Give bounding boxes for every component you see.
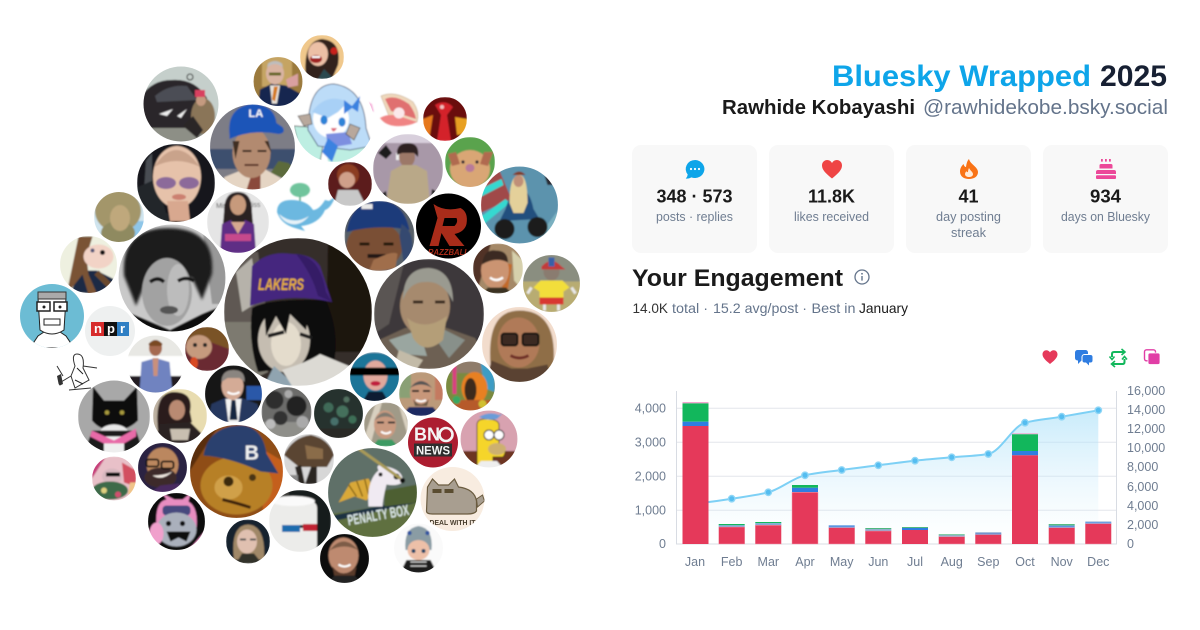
avatar: Homer with bird <box>460 410 518 468</box>
month labels: May <box>830 555 854 569</box>
engagement summary <box>632 300 908 316</box>
right axis labels: 2,000 <box>1127 518 1158 532</box>
engagement summary: 14.0K <box>632 300 669 316</box>
engagement summary: Best in <box>812 300 856 316</box>
month labels: Apr <box>795 555 815 569</box>
cumulative line <box>695 410 1098 504</box>
panel: days on Bluesky: 934 <box>1090 186 1122 206</box>
avatar: black and white portrait woman <box>118 224 226 332</box>
avatar: child on red couch <box>328 162 372 206</box>
avatar: game character in Lakers cap: LAKERS <box>258 275 304 294</box>
avatar: dark-haired woman <box>153 389 207 443</box>
month labels: Dec <box>1087 555 1109 569</box>
avatar: NPR logo: p <box>107 321 115 336</box>
right axis labels: 6,000 <box>1127 480 1158 494</box>
avatar: dog with sunglasses <box>92 456 136 500</box>
icon: pink shell <box>368 94 418 126</box>
avatar: blonde woman sitting outdoors <box>480 166 558 244</box>
avatar: pig-like animal on green <box>445 137 495 188</box>
panel: likes received <box>769 145 894 253</box>
icon: heart <box>822 160 842 178</box>
left axis labels: 3,000 <box>635 436 666 450</box>
cumulative area <box>695 410 1098 544</box>
avatar: woman with black glasses <box>482 306 558 382</box>
icon: chat bubble <box>686 160 704 179</box>
avatar: Penalty Box cartoon: PENALTY BOX <box>346 502 410 529</box>
avatar: creature in Dodgers cap <box>190 424 284 518</box>
heading: your engagement: Your Engagement <box>632 265 843 292</box>
avatar: black and white crowd <box>262 387 312 438</box>
month labels <box>685 555 1109 569</box>
avatar: man in navy suit and tie <box>204 365 262 423</box>
right axis labels: 12,000 <box>1127 422 1165 436</box>
avatar: white cylinder with 3D glasses <box>269 490 331 552</box>
month labels: Aug <box>941 555 963 569</box>
avatar: NPR logo: n <box>94 321 102 336</box>
month labels: Jul <box>907 555 923 569</box>
avatar: NPR logo <box>85 306 135 356</box>
right axis labels: 10,000 <box>1127 441 1165 455</box>
panel: posts and replies <box>632 145 757 253</box>
stacked bars <box>682 402 1111 544</box>
avatar: baseball player in blue helmet <box>344 201 414 271</box>
panel: posting streak: 41 <box>958 186 978 206</box>
avatar: cartoon man with glasses <box>20 284 84 348</box>
left axis labels: 0 <box>659 537 666 551</box>
avatar: BNO News logo: NEWS <box>416 446 450 458</box>
month labels: Jan <box>685 555 705 569</box>
panel: likes received: likes received <box>794 210 869 224</box>
chart: engagement by month <box>635 384 1165 569</box>
avatar: blue whale with tree <box>277 183 335 231</box>
avatar: man in Dodgers cap <box>210 104 296 190</box>
avatar: game character in Lakers cap <box>224 238 372 386</box>
right axis labels: 8,000 <box>1127 460 1158 474</box>
icon: replies legend <box>1075 350 1093 366</box>
user name and handle: @rawhidekobe.bsky.social <box>923 97 1168 119</box>
avatar: man in Dodgers cap: LA <box>248 108 263 120</box>
avatar: woman in purple dress <box>207 191 269 253</box>
avatar: pink-hat game mascot <box>148 492 206 550</box>
user name and handle <box>722 97 1168 119</box>
avatar cluster <box>20 35 580 584</box>
avatar: woman in purple dress: Miss <box>246 202 261 209</box>
avatar: red creature on fire <box>423 97 467 141</box>
avatar: kewpie doll <box>402 525 435 572</box>
avatar: ball pit with fire <box>446 361 496 411</box>
avatar: woman in purple dress: Miss <box>216 203 231 210</box>
icon: quotes legend <box>1144 350 1160 364</box>
left axis labels: 4,000 <box>635 402 666 416</box>
title: Bluesky Wrapped <box>832 60 1091 93</box>
engagement summary: total · <box>672 300 708 316</box>
left axis labels: 1,000 <box>635 504 666 518</box>
avatar: tuxedo cat with pink bow <box>78 380 150 454</box>
chart legend icons <box>1042 349 1160 367</box>
avatar: creature in Dodgers cap: B <box>244 442 259 464</box>
avatar: bull statue <box>284 434 334 484</box>
avatar: smiling man in car <box>473 244 523 294</box>
right axis labels: 4,000 <box>1127 499 1158 513</box>
avatar: sketch drawing <box>56 354 98 390</box>
avatar: laughing woman with red flower <box>300 35 344 79</box>
avatar: person with lollipop <box>185 327 229 371</box>
line markers <box>728 407 1102 502</box>
right axis labels: 0 <box>1127 537 1134 551</box>
avatar: Razzball logo <box>416 193 482 259</box>
avatar: blue-haired person with black bar <box>350 352 400 402</box>
panel: posts and replies: posts · replies <box>656 210 733 224</box>
panel: days on Bluesky <box>1043 145 1168 253</box>
avatar: Pusheen Deal With It <box>420 467 484 531</box>
panel: likes received: 11.8K <box>808 186 856 206</box>
month labels: Sep <box>977 555 999 569</box>
avatar: bald smiling man <box>320 534 370 584</box>
icon: flame <box>960 159 978 179</box>
panel: days on Bluesky: days on Bluesky <box>1061 210 1151 224</box>
engagement summary: 15.2 avg/post · <box>713 300 807 316</box>
avatar: smiling man in green shirt <box>364 402 408 446</box>
engagement summary: January <box>859 300 908 316</box>
avatar: Razzball logo: RAZZBALL <box>428 248 469 257</box>
month labels: Nov <box>1051 555 1074 569</box>
avatar: anime girl with blue hair <box>294 82 374 162</box>
panel: posting streak: day posting <box>936 210 1001 224</box>
avatar: smiling man in navy <box>399 372 443 416</box>
title: 2025 <box>1100 60 1167 93</box>
avatar: BNO News logo <box>408 418 458 468</box>
icon: reposts legend <box>1110 349 1127 367</box>
avatar: blonde woman with glasses <box>226 520 270 564</box>
avatar: NPR logo: r <box>120 321 125 336</box>
icon: birthday cake <box>1096 159 1116 179</box>
panel: posting streak: streak <box>951 226 987 240</box>
avatar: dark green bokeh <box>314 388 364 438</box>
avatar: woman with long brown hair <box>60 236 118 294</box>
left axis labels: 2,000 <box>635 470 666 484</box>
month labels: Jun <box>868 555 888 569</box>
panel: posts and replies: 348 · 573 <box>656 186 732 206</box>
right axis labels: 16,000 <box>1127 384 1165 398</box>
panel: posting streak <box>906 145 1031 253</box>
right axis labels <box>1127 384 1165 551</box>
avatar: bearded man with glasses <box>138 442 188 492</box>
month labels: Oct <box>1015 555 1035 569</box>
avatar: sports car selfie <box>144 66 218 142</box>
user name and handle: Rawhide Kobayashi <box>722 97 915 119</box>
month labels: Feb <box>721 555 743 569</box>
avatar: bearded man in coat <box>374 259 484 369</box>
right axis labels: 14,000 <box>1127 403 1165 417</box>
avatar: toy dog in yellow shirt <box>522 254 580 312</box>
avatar: Penalty Box cartoon <box>328 448 418 538</box>
month labels: Mar <box>758 555 779 569</box>
icon: likes legend <box>1042 350 1058 364</box>
avatar: woman in blue suit <box>126 335 184 394</box>
avatar: man in suit pointing <box>253 56 303 106</box>
avatar: bald woman with purple glasses <box>137 144 215 223</box>
avatar: curly-haired person <box>94 192 144 242</box>
avatar: BNO News logo: BN <box>414 424 440 444</box>
avatar: Pusheen Deal With It: DEAL WITH IT <box>430 518 476 527</box>
icon: info <box>855 270 869 284</box>
avatar: person in beige shirt <box>373 134 443 204</box>
left axis labels <box>635 402 666 551</box>
